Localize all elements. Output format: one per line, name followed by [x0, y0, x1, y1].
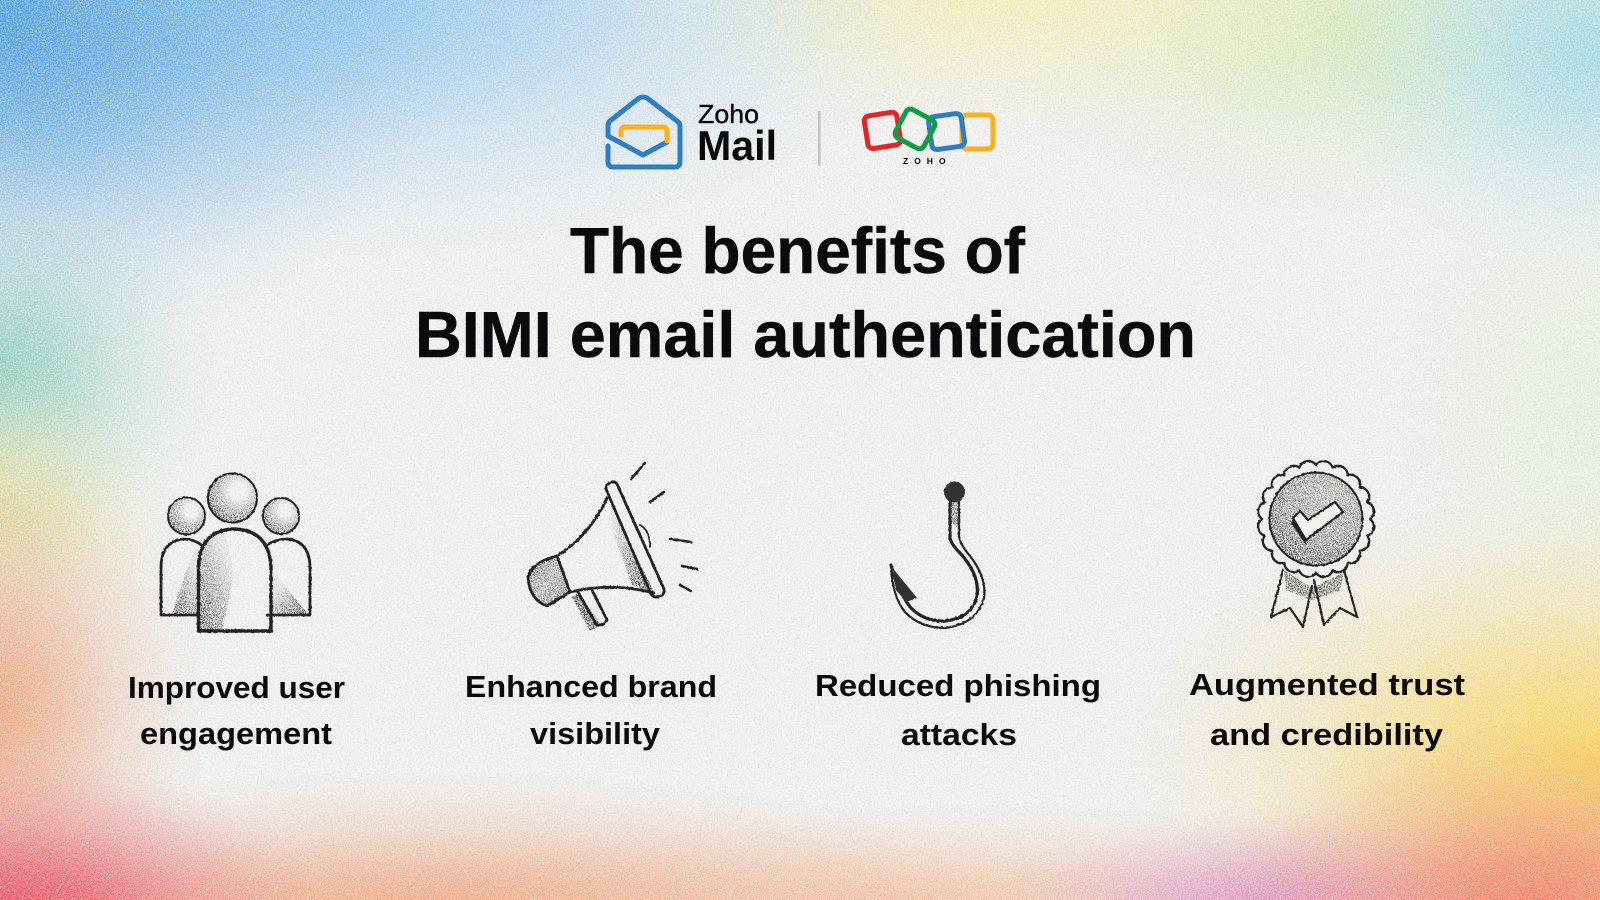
panel: improved user engagement — [128, 474, 345, 751]
icon: Zoho Mail envelope — [608, 97, 680, 167]
label: Augmented trust — [1189, 667, 1465, 702]
icon: fishing hook — [891, 482, 984, 628]
header logos — [608, 97, 993, 169]
label: Enhanced brand — [465, 669, 717, 704]
logo divider — [818, 111, 820, 166]
logo text: Zoho Mail — [697, 99, 777, 169]
label: visibility — [530, 716, 661, 751]
logo: Zoho rings: ZOHO — [903, 156, 952, 166]
panel: augmented trust and credibility — [1189, 461, 1465, 752]
label: Reduced phishing — [815, 668, 1101, 703]
title: BIMI email authentication — [415, 298, 1196, 371]
label — [128, 670, 345, 751]
logo: Zoho rings — [864, 107, 993, 166]
label: attacks — [901, 717, 1017, 752]
label: engagement — [140, 716, 332, 751]
logo text: Zoho Mail: Mail — [697, 122, 777, 169]
icon: three people — [161, 474, 310, 631]
title — [415, 214, 1196, 371]
title: The benefits of — [570, 214, 1025, 287]
label: Improved user — [128, 670, 345, 705]
panel: enhanced brand visibility — [465, 463, 717, 751]
label — [465, 669, 717, 751]
icon: award rosette — [1258, 461, 1374, 627]
icon: megaphone — [528, 463, 697, 631]
label — [815, 668, 1101, 752]
logo text: Zoho Mail: Zoho — [698, 99, 759, 129]
label — [1189, 667, 1465, 752]
panel: reduced phishing attacks — [815, 482, 1101, 752]
label: and credibility — [1210, 717, 1444, 752]
